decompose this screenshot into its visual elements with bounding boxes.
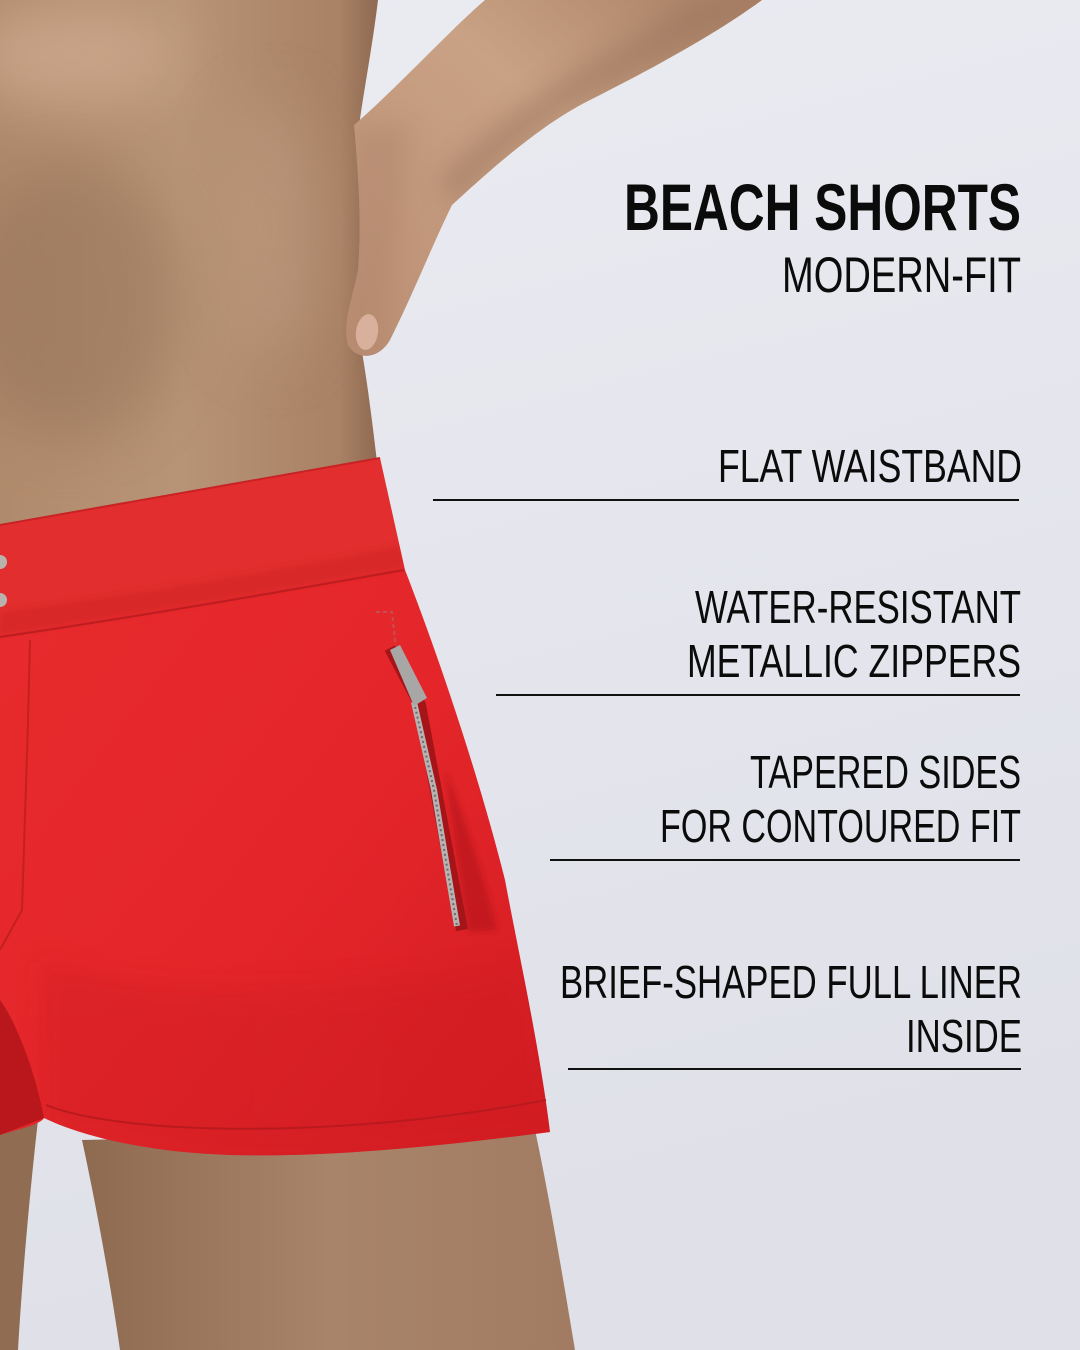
- fingernail: [354, 313, 380, 351]
- hem stitch: [46, 1100, 546, 1129]
- waistband top edge: [0, 458, 380, 525]
- feature: zippers: [496, 581, 1021, 696]
- pocket stitch: [376, 612, 396, 650]
- metallic zipper: [390, 645, 462, 930]
- feature: tapered sides: [550, 746, 1021, 861]
- other leg: [0, 1120, 38, 1350]
- waistband seam: [0, 570, 404, 637]
- shorts body: [0, 450, 560, 1170]
- photo: model wearing red beach shorts: [0, 0, 770, 1350]
- fly placket: [0, 640, 30, 950]
- feature: liner: INSIDE: [906, 1010, 1022, 1062]
- torso: [0, 0, 400, 540]
- thigh: [82, 1130, 575, 1350]
- arm and hand: [330, 0, 770, 370]
- heading: [624, 170, 1021, 303]
- feature: liner: [560, 956, 1022, 1070]
- snap buttons: [0, 555, 7, 607]
